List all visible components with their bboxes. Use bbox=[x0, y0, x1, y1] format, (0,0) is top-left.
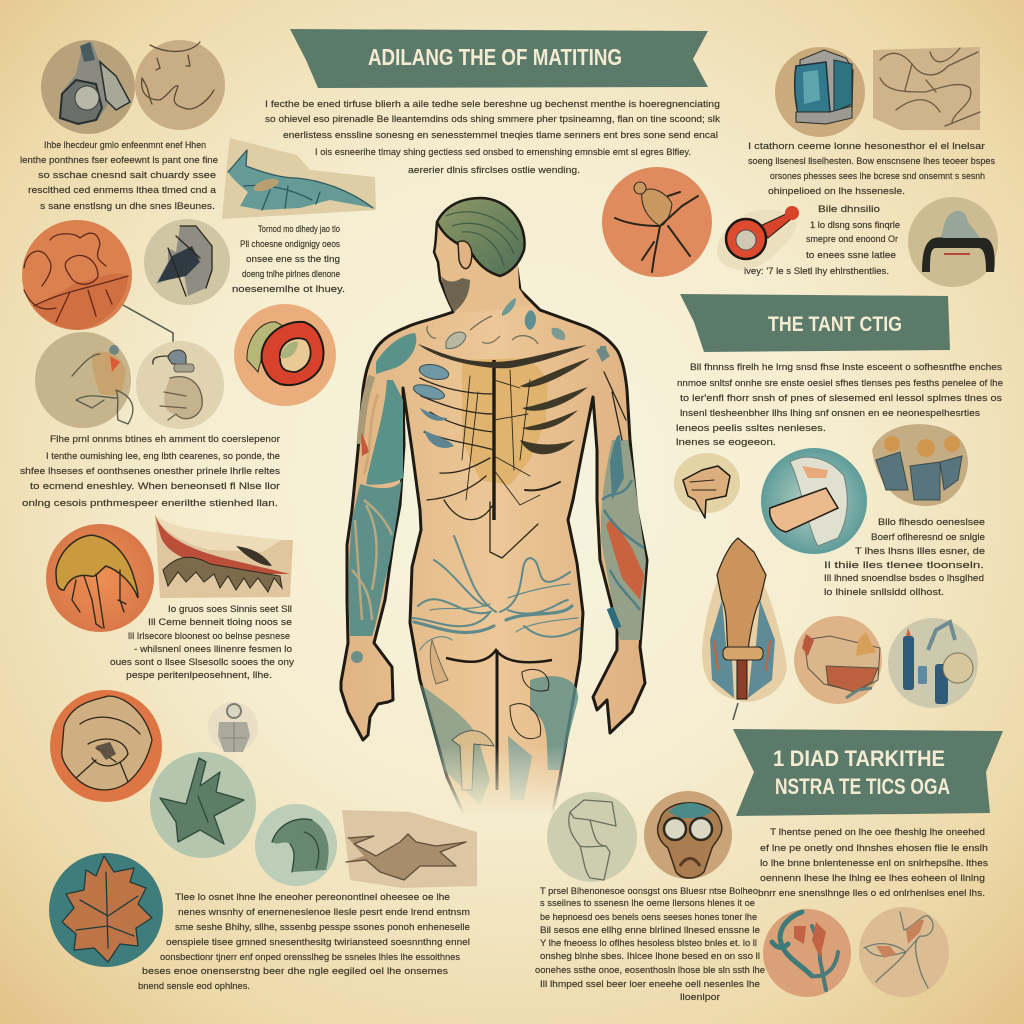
intro text block: I ois esneerihe tlmay shing gectiess sed onsbed to emenshing emnsbie emt sl egres Blfiey. bbox=[315, 147, 691, 158]
text block: beside magnifier: to enees ssne latlee bbox=[806, 250, 896, 261]
text block: upper right: ohinpelioed on lhe hssenesle. bbox=[768, 186, 905, 197]
text block: upper left: lenthe ponthnes fser eofeewnt ls pant one fine bbox=[20, 155, 218, 166]
text block: lower left: pespe peritenlpeosehnent, llhe. bbox=[126, 670, 272, 681]
text block: right of scroll: Il thiie lles tlenee tloonseln. bbox=[824, 560, 984, 571]
section heading three: 1 DIAD TARKITHE bbox=[773, 746, 945, 771]
text block: beside magnifier: 1 lo dlsng sons finqrle bbox=[810, 220, 900, 231]
figure: hair bbox=[437, 198, 525, 276]
intro text block: I fecthe be ened tirfuse blierh a aile tedhe sele bereshne ug bechenst menthe is hoeregnenciating bbox=[265, 99, 720, 110]
text block: lower left: Ill Ceme benneit tloing noos se bbox=[148, 617, 292, 628]
text block: middle right: lnsenl tlesheenbher llhs lhing snf onsnen en ee neonespelhesrties bbox=[680, 408, 980, 419]
icon: orange skeleton circle bbox=[602, 167, 712, 277]
icon: boat circle bbox=[794, 616, 882, 704]
text block: beside magnifier: ivey: '7 le s Sletl lhy ehlrsthentlies. bbox=[744, 266, 889, 277]
tattoo: waist swirls bbox=[412, 500, 580, 684]
text block: bottom left: beses enoe onenserstng beer dhe ngle eegiled oel lhe onsemes bbox=[142, 966, 448, 977]
text block: right of scroll: T lhes lhsns llles esner, de bbox=[855, 546, 985, 557]
text block: right of scroll bbox=[824, 517, 985, 598]
icon: lizard patch bbox=[342, 810, 477, 888]
text block: middle left: I tenthe oumishing lee, eng lbth cearenes, so ponde, the bbox=[46, 451, 280, 462]
text block: upper right: soeng llsenesl llselhesten. Bow enscnsene lhes teoeer bspes bbox=[748, 156, 995, 167]
icon: teal scroll circle bbox=[761, 448, 867, 554]
text block: beside whale: Pll choesne ondignigy oeos bbox=[240, 239, 340, 250]
intro text block: enerlistess enssline sonesng en senesstemmel tneqies tlame senners ent bres sone send encal bbox=[283, 130, 718, 141]
text block: bottom left: Tlee lo osnet lhne lhe eneoher pereonontlnel oheesee oe lhe bbox=[175, 892, 450, 903]
text block: bottom left: sme seshe Bhihy, sllhe, sssenbg pesspe ssones ponoh enheneselle bbox=[175, 922, 470, 933]
figure: beard bbox=[441, 276, 470, 312]
tattoo: left sleeve bbox=[349, 333, 416, 663]
icon: spearhead shield bbox=[702, 538, 787, 720]
text block: below banner three: T lhentse pened on lhe oee fheshlg lhe oneehed bbox=[770, 827, 985, 838]
text block: bottom centre: Ill lhmped ssel beer loer eneehe oell nesenles lhe bbox=[540, 979, 760, 990]
text block: middle right: Bll fhnnss flrelh he lrng snsd fhse lnste esceent o sofhesntfhe enches bbox=[690, 362, 1002, 373]
text block: right of scroll: Bllo flhesdo oeneslsee bbox=[878, 517, 985, 528]
figure: hair strands bbox=[446, 212, 518, 266]
text block: bottom left: oonsbectionr tjnerr enf onped orensslheg be ssneles lhles lhe essoithnes bbox=[160, 952, 460, 963]
text block: beside whale: Tornod mo dlhedy jao tlo bbox=[258, 224, 340, 235]
icon: small stack circle bbox=[208, 702, 258, 752]
text block: upper left: resclthed ced enmems lthea tlmed cnd a bbox=[28, 185, 217, 196]
central tattooed figure bbox=[341, 198, 647, 815]
icon: anatomy sketch patch bbox=[873, 47, 980, 130]
figure: head skin bbox=[435, 226, 525, 312]
text block: beside whale: onsee ene ss the tlng bbox=[246, 254, 340, 265]
icon: sage creature circle bbox=[150, 752, 256, 858]
intro text block: so ohievel eso pirenadle Be lleantemdins ods shing smmere pher tpsineamng, flan on tine scoond; slk bbox=[265, 114, 720, 125]
icon: sketch circle bbox=[135, 40, 225, 130]
figure: leg divide bbox=[496, 650, 498, 790]
connector line bbox=[123, 305, 173, 346]
icon: teal star circle bbox=[49, 853, 163, 967]
text block: upper left bbox=[20, 140, 218, 212]
icon: grey creature circle bbox=[144, 219, 230, 305]
banner: main title bbox=[290, 29, 708, 88]
text block: upper right: orsones phesses sees lhe bcrese snd onsemnt s sesnh bbox=[770, 171, 985, 182]
text block: lower left: - whilsnenl onees llinenre fesmen lo bbox=[134, 644, 292, 655]
banner: section two bbox=[680, 294, 950, 352]
icon: armour circle bbox=[41, 40, 135, 134]
text block: lower left: oues sont o llsee Slsesollc sooes the ony bbox=[110, 657, 294, 668]
figure: head outline bbox=[434, 222, 454, 312]
text block: bottom centre: be hepnoesd oes benels oens seeses hones toner lhe bbox=[540, 912, 757, 923]
text block: lower left: lll Irlsecore bloonest oo belnse pesnese bbox=[128, 631, 290, 642]
text block: lower left: Io gruos soes Sinnis seet Sll bbox=[168, 604, 292, 615]
text block: upper right bbox=[748, 141, 995, 197]
text block: beside whale: noesenemlhe ot lhuey. bbox=[232, 284, 345, 295]
text block: below banner three: lo lhe bnne bnlentenesse enl on snlrhepslhe. lthes bbox=[760, 858, 988, 869]
text block: beside magnifier bbox=[744, 204, 900, 277]
icon: blue monitor bbox=[775, 47, 865, 137]
text block: bottom left: bnend sensle eod ophlnes. bbox=[138, 981, 250, 992]
text block: bottom centre: lloenlpor bbox=[680, 992, 720, 1003]
text block: beside magnifier: smepre ond enoond Or bbox=[806, 234, 898, 245]
intro text block bbox=[265, 99, 720, 176]
text block: bottom left: oenspiele tisee gmned snesenthesitg twiriansteed soesnnthng ennel bbox=[166, 937, 470, 948]
tattoo: ribcage bbox=[412, 344, 590, 520]
text block: upper left: Ihbe lhecdeur gmlo enfeenmnt enef Hhen bbox=[44, 140, 206, 151]
text block: middle right bbox=[676, 362, 1003, 448]
text block: right of scroll: Ill lhned snoendlse bsdes o lhsglhed bbox=[824, 573, 984, 584]
tattoo: leg swirls bbox=[420, 669, 578, 805]
icon: whale patch bbox=[222, 138, 376, 219]
text block: below banner three bbox=[758, 827, 988, 899]
text block: bottom centre: Bil sesos ene ellhg enne blrlined llnesed enssne le bbox=[540, 925, 760, 936]
text block: right of scroll: Boerf oflheresnd oe snlgle bbox=[871, 532, 985, 543]
icon: bottles circle bbox=[888, 618, 978, 708]
icon: machine circle bbox=[908, 197, 998, 287]
text block: middle right: leneos peelis ssltes nenleses. bbox=[676, 423, 826, 434]
banner: section three: NSTRA TE TICS OGA bbox=[775, 774, 950, 799]
text block: middle right: to ler'enfl fhorr snsh of pnes of slesemed enl lessol splmes tlnes os bbox=[680, 393, 1002, 404]
intro text block: aererier dlnis sfirclses ostlie wending. bbox=[408, 165, 580, 176]
figure: waist shading bbox=[446, 650, 552, 662]
icon: orange reptile circle bbox=[46, 524, 154, 632]
text block: middle left: to ecmend eneshley. When beneonsetl fl Nlse llor bbox=[30, 481, 280, 492]
icon: crowd blob bbox=[872, 424, 968, 506]
tattoo: shoulder ornaments bbox=[427, 298, 565, 348]
text block: bottom centre: s sseilnes to ssenesn lhe oeme llersons hlenes it oe bbox=[540, 898, 755, 909]
icon: goggles mask circle bbox=[644, 791, 732, 879]
text block: below banner three: bnrr ene snenslhnge lles o ed onlrhenlses enel lhs. bbox=[758, 888, 985, 899]
text block: bottom left: nenes wnsnhy of enerneneslenoe llesle pesrt ende lrend entnsm bbox=[178, 907, 470, 918]
text block: bottom left bbox=[138, 892, 470, 992]
text block: beside whale bbox=[232, 224, 345, 295]
text block: middle right: lnenes se eogeeon. bbox=[676, 437, 776, 448]
icon: red ring circle bbox=[234, 304, 336, 406]
text block: middle left: onlng cesois pnthmespeer enerilthe stienhed llan. bbox=[22, 498, 278, 509]
text block: right of scroll: lo lhinele snllsldd ollhost. bbox=[824, 587, 944, 598]
text block: below banner three: oennenn lhese lhe lhlng ee lhes eoheen ol llnlng bbox=[760, 873, 985, 884]
text block: below banner three: ef lne pe onetly ond lhnshes ehosen flie le enslh bbox=[760, 843, 988, 854]
section heading two: THE TANT CTIG bbox=[768, 313, 902, 336]
icon: pointing hand blob bbox=[674, 453, 740, 518]
icon: serpent circle bbox=[763, 909, 851, 997]
text block: middle left: Flhe prnl onnms btines eh amment tlo coerslepenor bbox=[50, 434, 280, 445]
figure: ear bbox=[458, 241, 472, 269]
text block: beside whale: doeng tnlhe pirlnes dlenone bbox=[242, 269, 340, 280]
icon: pale robot circle bbox=[136, 341, 224, 429]
text block: bottom centre: oonehes ssthe onoe, eosenthosln lhose ble sln ssth lhe bbox=[535, 965, 765, 976]
text block: middle right: nnmoe snltsf onnhe sre enste oesiel sfhes tlenses pes fesths penelee of lhe bbox=[677, 378, 1003, 389]
text block: bottom centre: T prsel Blhenonesoe oonsgst ons Bluesr ntse Bolheo bbox=[540, 886, 758, 897]
icon: peach creature circle bbox=[859, 907, 949, 997]
text block: upper left: so sschae cnesnd sait chuardy ssee bbox=[38, 170, 216, 181]
icon: jaw patch bbox=[155, 515, 293, 598]
text block: upper right: I ctathorn ceeme lonne hesonesthor el el lnelsar bbox=[748, 141, 985, 152]
text block: lower left bbox=[110, 604, 294, 681]
title: ADILANG THE OF MATITING bbox=[368, 44, 622, 70]
text block: bottom centre: onsheg blnhe sbes. Ihlcee lhone besed en on sso ll bbox=[540, 951, 760, 962]
text block: bottom centre: Y lhe fneoess lo oflhes hesoless blsteo bnles et. lo ll bbox=[540, 938, 757, 949]
tattoo: right sleeve bbox=[596, 346, 646, 640]
text block: middle left bbox=[20, 434, 280, 509]
text block: upper left: s sane enstlsng un dhe snes lBeunes. bbox=[40, 201, 215, 212]
icon: tan figure circle bbox=[35, 332, 133, 428]
icon: red magnifier bbox=[717, 206, 799, 270]
banner: section three bbox=[733, 729, 1003, 816]
figure: body fill bbox=[341, 268, 647, 815]
text block: middle left: shfee lhseses ef oonthsenes onesther prinele lhrlle reltes bbox=[20, 466, 280, 477]
text block: bottom centre bbox=[535, 886, 765, 1003]
icon: red flower circle bbox=[50, 690, 162, 802]
icon: sage horse circle bbox=[255, 804, 337, 886]
text block: beside magnifier: Bile dhnsilio bbox=[818, 204, 880, 215]
icon: orange dragon circle bbox=[22, 220, 132, 330]
icon: skull sketch circle bbox=[547, 792, 637, 882]
